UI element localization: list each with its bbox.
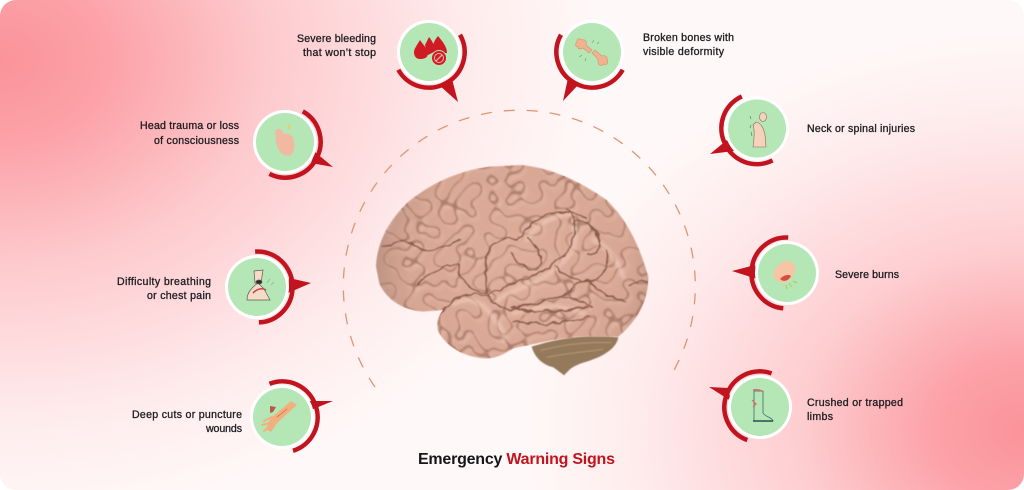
label: breathing difficulty bbox=[117, 276, 211, 302]
icon: boot bbox=[752, 390, 773, 421]
label: severe bleeding: that won’t stop bbox=[303, 47, 376, 59]
callout: deep cuts bbox=[250, 381, 333, 451]
label: severe burns: Severe burns bbox=[835, 269, 899, 281]
dashed arc around brain bbox=[343, 110, 695, 387]
cerebrum bbox=[376, 165, 648, 358]
label: severe bleeding bbox=[297, 33, 376, 59]
label: head trauma: of consciousness bbox=[154, 135, 239, 147]
label: crushed limbs: Crushed or trapped bbox=[807, 397, 903, 409]
title: Emergency Warning Signs bbox=[418, 451, 615, 468]
label: head trauma: Head trauma or loss bbox=[140, 120, 239, 132]
label: crushed limbs: limbs bbox=[807, 411, 833, 423]
callout: head trauma bbox=[253, 110, 333, 178]
cerebellum bbox=[532, 336, 618, 375]
label: breathing difficulty: Difficulty breathing bbox=[117, 276, 211, 288]
icon: broken bone bbox=[576, 39, 608, 65]
label: deep cuts bbox=[132, 409, 242, 435]
label: breathing difficulty: or chest pain bbox=[147, 290, 211, 302]
label: broken bones: Broken bones with bbox=[643, 32, 734, 44]
icon: person holding chest bbox=[247, 270, 274, 300]
label: deep cuts: wounds bbox=[205, 423, 242, 435]
callout: severe bleeding bbox=[397, 20, 465, 102]
label: head trauma bbox=[140, 120, 239, 147]
label: broken bones: visible deformity bbox=[643, 46, 725, 58]
callout: neck or spinal injuries bbox=[710, 96, 789, 164]
callout: broken bones bbox=[556, 20, 624, 101]
label: crushed limbs bbox=[807, 397, 903, 423]
label: broken bones bbox=[643, 32, 734, 58]
callout: severe burns bbox=[732, 237, 819, 308]
brain illustration bbox=[376, 165, 648, 375]
label: severe bleeding: Severe bleeding bbox=[297, 33, 376, 45]
icon: wounded arm bbox=[262, 401, 297, 432]
label: deep cuts: Deep cuts or puncture bbox=[132, 409, 242, 421]
icon: spine figure bbox=[750, 112, 766, 147]
icon: blood drops bbox=[414, 36, 447, 66]
callout: crushed limbs bbox=[709, 371, 792, 440]
label: neck or spinal injuries: Neck or spinal injuries bbox=[807, 123, 915, 135]
icon: burned hand bbox=[773, 261, 797, 289]
callout: breathing difficulty bbox=[225, 252, 311, 322]
icon: injured head bbox=[275, 124, 294, 156]
